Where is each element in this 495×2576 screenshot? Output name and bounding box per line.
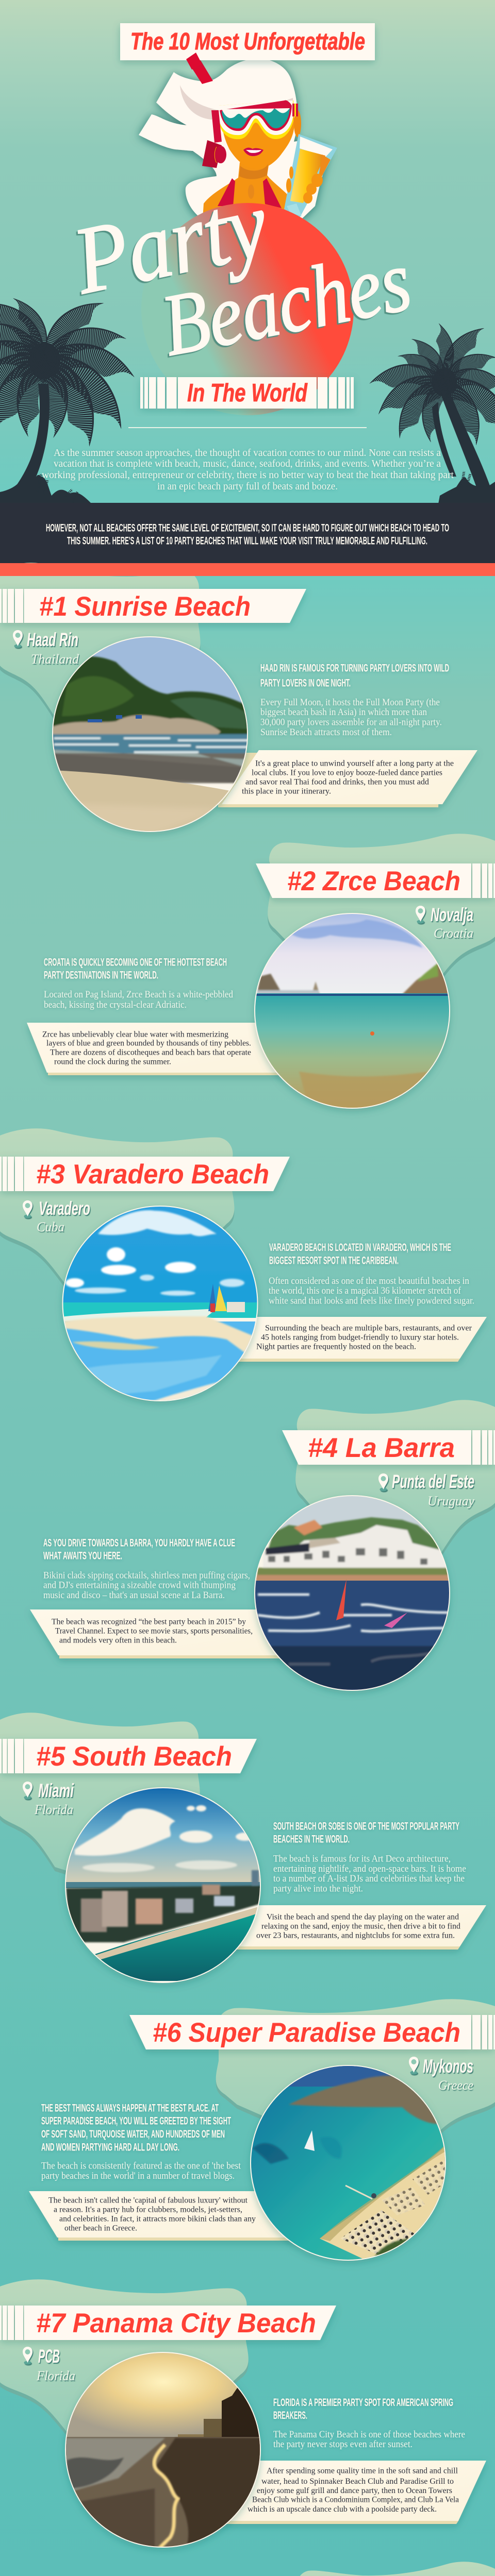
intro paragraph: vacation that is complete with beach, music, dance, seafood, drinks, and events. Whether you’re a xyxy=(54,458,441,469)
woman face xyxy=(221,116,294,169)
ribbon: #3 Varadero Beach xyxy=(36,1159,269,1190)
location: PCB xyxy=(38,2346,60,2367)
text: Sunrise Beach attracts most of them. xyxy=(260,727,392,738)
text: CROATIA IS QUICKLY BECOMING ONE OF THE HOTTEST BEACH xyxy=(44,956,227,969)
text: AND WOMEN PARTYING HARD ALL DAY LONG. xyxy=(41,2141,179,2154)
blob xyxy=(0,1128,234,1297)
callout: layers of blue and green bounded by thousands of tiny pebbles. xyxy=(46,1039,251,1048)
text xyxy=(260,663,449,738)
rule xyxy=(128,427,367,428)
location: Thailand xyxy=(31,652,79,667)
ribbon xyxy=(256,863,495,898)
blob xyxy=(295,2562,495,2576)
text xyxy=(44,956,234,1010)
panel: #8 White Beach xyxy=(30,2562,495,2576)
text: BEACHES IN THE WORLD. xyxy=(273,1833,350,1845)
goggle strap xyxy=(292,104,298,116)
heading script: Party Beaches: Party xyxy=(64,171,276,314)
dark intro band xyxy=(0,503,495,563)
text: SUPER PARADISE BEACH, YOU WILL BE GREETED BY THE SIGHT xyxy=(41,2115,231,2127)
heading script: Party Beaches xyxy=(64,171,418,374)
text xyxy=(43,1537,250,1601)
ribbon: #2 Zrce Beach xyxy=(287,866,460,896)
text: AS YOU DRIVE TOWARDS LA BARRA, YOU HARDLY HAVE A CLUE xyxy=(43,1537,235,1549)
callout: a reason. It's a party hub for clubbers, models, jet-setters, xyxy=(54,2205,242,2214)
callout: After spending some quality time in the soft sand and chill xyxy=(267,2467,458,2475)
text: Every Full Moon, it hosts the Full Moon Party (the xyxy=(260,698,440,708)
photo xyxy=(253,1494,454,1694)
text: entertaining nightlife, and open-space bars. It is home xyxy=(273,1864,466,1874)
woman neck and shoulders xyxy=(203,162,289,219)
callout: round the clock during the summer. xyxy=(54,1057,171,1066)
ribbon: #4 La Barra xyxy=(308,1433,455,1463)
callout: enjoy some gulf grill and dance party, then to Ocean Towers xyxy=(257,2486,452,2495)
red band xyxy=(0,563,495,576)
text: to a number of A-list DJs and celebrities that keep the xyxy=(273,1874,465,1884)
text: Often considered as one of the most beautiful beaches in xyxy=(269,1276,469,1286)
panel: #3 Varadero Beach xyxy=(0,1128,487,1404)
text xyxy=(273,1821,466,1894)
text: and DJ's entertaining a sizeable crowd with thumping xyxy=(43,1581,236,1591)
text: The beach is consistently featured as the one of 'the best xyxy=(41,2161,241,2171)
callout xyxy=(29,2191,309,2241)
text: PARTY LOVERS IN ONE NIGHT. xyxy=(260,677,351,689)
callout: relaxing on the sand, enjoy the music, then drive a bit to find xyxy=(261,1922,460,1931)
text: 30,000 party lovers assemble for an all-night party. xyxy=(260,717,442,727)
ribbon xyxy=(0,589,306,623)
title banner: The 10 Most Unforgettable xyxy=(130,28,365,55)
photo xyxy=(64,2350,263,2550)
callout: Zrce has unbelievably clear blue water with mesmerizing xyxy=(42,1030,228,1039)
text: music and disco – that's an usual scene at La Barra. xyxy=(43,1590,225,1601)
banner: In The World: In The World xyxy=(187,379,308,407)
callout: over 23 bars, restaurants, and nightclubs for some extra fun. xyxy=(256,1931,455,1940)
intro paragraph: working professional, entrepreneur or celebrity, there is no better way to beat the heat than taking part xyxy=(42,469,454,481)
text: THE BEST THINGS ALWAYS HAPPEN AT THE BEST PLACE. AT xyxy=(41,2102,219,2114)
photo xyxy=(253,912,454,1112)
callout: other beach in Greece. xyxy=(64,2224,137,2233)
text xyxy=(269,1242,474,1307)
lips xyxy=(243,148,263,156)
blob xyxy=(216,1999,495,2168)
callout xyxy=(27,1023,309,1075)
callout: this place in your itinerary. xyxy=(242,787,331,795)
section 1 blob (clipped under red band) xyxy=(0,563,201,732)
location: Haad Rin xyxy=(27,629,78,650)
text: Located on Pag Island, Zrce Beach is a white-pebbled xyxy=(44,990,234,1000)
callout: The beach isn't called the 'capital of fabulous luxury' without xyxy=(48,2196,248,2205)
location: Varadero xyxy=(39,1198,90,1219)
callout: 45 hotels ranging from budget-friendly to luxury star hotels. xyxy=(261,1333,459,1342)
callout: There are dozens of discotheques and beach bars that operate xyxy=(50,1048,251,1057)
text: biggest beach bash in Asia) in which more than xyxy=(260,707,427,718)
location xyxy=(409,2056,473,2093)
callout xyxy=(206,1317,487,1362)
text xyxy=(273,2397,465,2450)
blob xyxy=(268,834,495,1003)
snorkel top xyxy=(186,53,213,84)
blob xyxy=(295,1400,495,1569)
location: Miami xyxy=(38,1780,74,1801)
text xyxy=(41,2102,241,2181)
beer glass xyxy=(284,134,337,217)
panel: #6 Super Paradise Beach xyxy=(29,1999,495,2264)
text: the party never stops even after sunset. xyxy=(273,2439,412,2450)
text: white sand that looks and feels like finely powdered sugar. xyxy=(269,1296,474,1307)
intro paragraph xyxy=(42,447,454,492)
snorkel over title xyxy=(186,53,202,70)
panel: #1 Sunrise Beach xyxy=(0,589,477,835)
location xyxy=(23,1780,74,1817)
right palm silhouette xyxy=(369,318,495,504)
location xyxy=(23,1198,90,1234)
photo xyxy=(64,1787,263,1983)
blob xyxy=(0,1713,200,1882)
location xyxy=(416,904,473,941)
text: beach, kissing the crystal-clear Adriatic. xyxy=(44,1000,187,1010)
intro paragraph: in an epic beach party full of beats and booze. xyxy=(157,481,338,492)
text: WHAT AWAITS YOU HERE. xyxy=(43,1550,122,1562)
location: Cuba xyxy=(37,1219,64,1234)
text: OF SOFT SAND, TURQUOISE WATER, AND HUNDREDS OF MEN xyxy=(41,2128,225,2140)
location xyxy=(13,629,79,667)
location xyxy=(23,2346,75,2383)
location: Uruguay xyxy=(427,1494,474,1509)
ribbon xyxy=(282,1430,495,1465)
location: Florida xyxy=(36,2368,75,2383)
text: the world, this one is a magical 36 kilometer stretch of xyxy=(269,1286,461,1296)
callout: and celebrities. In fact, it attracts more bikini clads than any xyxy=(59,2214,256,2224)
callout xyxy=(217,2461,486,2524)
callout: which is an upscale dance club with a poolside party deck. xyxy=(248,2505,437,2514)
callout xyxy=(30,1609,309,1658)
ribbon: #5 South Beach xyxy=(36,1741,232,1772)
callout: and models very often in this beach. xyxy=(59,1636,177,1645)
location xyxy=(378,1471,474,1509)
text: party alive into the night. xyxy=(273,1884,363,1894)
callout xyxy=(217,1905,486,1950)
woman hair and hat xyxy=(139,59,330,219)
callout: The beach was recognized “the best party beach in 2015” by xyxy=(52,1618,246,1626)
location: Greece xyxy=(438,2078,473,2093)
left palm silhouette xyxy=(0,287,140,504)
illustration: woman with goggles and beer xyxy=(139,53,337,219)
ear xyxy=(294,110,301,137)
panel: #4 La Barra xyxy=(30,1400,495,1694)
callout: Visit the beach and spend the day playing on the water and xyxy=(267,1912,459,1922)
callout: Beach Club which is a Condominium Complex, and Club La Vela xyxy=(252,2496,459,2504)
ribbon: #1 Sunrise Beach xyxy=(39,591,251,622)
text: PARTY DESTINATIONS IN THE WORLD. xyxy=(44,970,158,981)
callout xyxy=(218,750,477,807)
callout: Night parties are frequently hosted on the beach. xyxy=(256,1343,416,1351)
ribbon: #7 Panama City Beach xyxy=(36,2308,316,2338)
blob xyxy=(0,2279,249,2448)
ribbon: #6 Super Paradise Beach xyxy=(153,2018,460,2048)
callout: It's a great place to unwind yourself after a long party at the xyxy=(255,759,454,768)
location: Croatia xyxy=(434,926,473,941)
callout: Travel Channel. Expect to see movie stars, sports personalities, xyxy=(55,1627,253,1635)
text: The Panama City Beach is one of those beaches where xyxy=(273,2430,465,2440)
location: Florida xyxy=(34,1802,73,1817)
heading script: Party Beaches: Beaches xyxy=(154,231,418,374)
snorkel tube and mouthpiece xyxy=(202,110,226,168)
callout: local clubs. If you love to enjoy booze-fueled dance parties xyxy=(252,769,442,777)
photo xyxy=(61,1205,262,1404)
bikini straps xyxy=(218,178,235,206)
banner: In The World xyxy=(140,377,354,409)
callout: and savor real Thai food and drinks, then you must add xyxy=(245,778,429,786)
panel: #7 Panama City Beach xyxy=(0,2279,486,2550)
intro sun disc xyxy=(141,203,354,415)
title banner xyxy=(120,23,375,60)
text: Bikini clads sipping cocktails, shirtless men puffing cigars, xyxy=(43,1570,250,1581)
text: party beaches in the world' in a number of travel blogs. xyxy=(41,2171,235,2181)
photo xyxy=(52,634,250,835)
goggles xyxy=(219,100,293,139)
intro paragraph: As the summer season approaches, the thought of vacation comes to our mind. None can resists a xyxy=(54,447,441,459)
photo xyxy=(249,2063,448,2264)
callout: water, head to Spinnaker Beach Club and Paradise Grill to xyxy=(261,2477,454,2486)
panel: #5 South Beach xyxy=(0,1713,486,1983)
text: The beach is famous for its Art Deco architecture, xyxy=(273,1854,451,1864)
callout: Surrounding the beach are multiple bars, restaurants, and over xyxy=(265,1324,472,1332)
panel: #2 Zrce Beach xyxy=(27,834,495,1112)
text: BREAKERS. xyxy=(273,2410,307,2421)
